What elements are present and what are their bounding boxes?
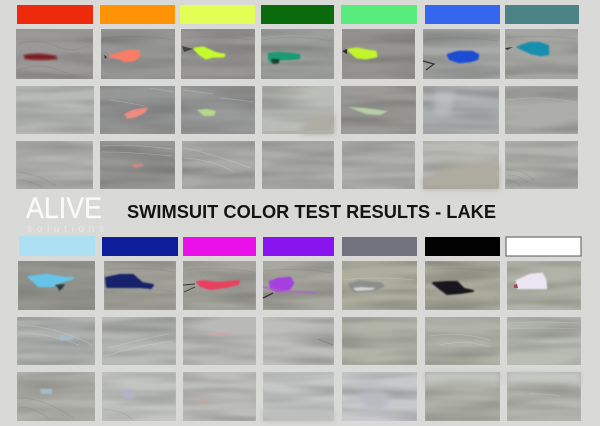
top row 1: garments at the surface: [16, 29, 578, 79]
photo: yellow, mid depth: [181, 86, 255, 134]
photo: red, mid depth: [16, 86, 94, 134]
bottom row 3: garments at deep level: [17, 372, 581, 421]
photo: black: [425, 261, 500, 310]
photo: navy, deep: [102, 372, 176, 421]
photo: blue, deep: [423, 141, 499, 189]
title: SWIMSUIT COLOR TEST RESULTS - LAKE: [127, 202, 496, 222]
bottom row 2: garments at mid depth: [17, 317, 581, 365]
photo: light blue: [18, 261, 95, 310]
photo: grey, deep: [342, 372, 417, 421]
photo: magenta, deep: [183, 372, 256, 421]
photo: orange, mid depth: [100, 86, 175, 134]
photo: light green: [342, 29, 415, 79]
photo: black, deep: [425, 372, 500, 421]
photo: black, mid depth: [425, 317, 500, 365]
photo: teal, mid depth: [505, 86, 578, 134]
photo: yellow, deep: [182, 141, 255, 189]
photo: blue: [423, 29, 500, 79]
logo: Alive Solutions: solutions: [27, 224, 104, 235]
photo: grey: [342, 261, 417, 310]
photo: purple: [263, 261, 334, 310]
photo: light green, deep: [342, 141, 415, 189]
photo: light green, mid depth: [341, 86, 416, 134]
photo: light blue, mid depth: [17, 317, 95, 365]
photo: white, mid depth: [507, 317, 581, 365]
logo: Alive Solutions: ALIVE: [26, 192, 102, 225]
photo: white, deep: [507, 372, 581, 421]
photo: navy, mid depth: [102, 317, 176, 365]
photo: white: [507, 261, 581, 310]
photo: orange, deep: [100, 141, 175, 189]
photo: purple, mid depth: [263, 317, 334, 365]
top row 3: garments at deep level: [16, 141, 578, 189]
photo: teal: [505, 29, 578, 79]
photo: light blue, deep: [17, 372, 95, 421]
bottom row 1: garments at the surface: [18, 261, 581, 310]
photo: teal, deep: [505, 141, 578, 189]
photo: dark green: [261, 29, 334, 79]
photo: grey, mid depth: [342, 317, 417, 365]
top row 2: garments at mid depth: [16, 86, 578, 134]
photo: blue, mid depth: [423, 86, 499, 134]
top colour swatches: [17, 5, 579, 24]
photo: purple, deep: [263, 372, 334, 421]
photo: magenta: [183, 261, 256, 310]
photo: dark green, deep: [262, 141, 334, 189]
photo: red: [16, 29, 93, 79]
bottom colour swatches: [19, 236, 581, 256]
photo: navy: [104, 261, 176, 310]
photo: magenta, mid depth: [183, 317, 256, 365]
photo: dark green, mid depth: [262, 86, 334, 134]
photo: red, deep: [16, 141, 93, 189]
photo: yellow: [181, 29, 255, 79]
photo: orange: [101, 29, 175, 79]
